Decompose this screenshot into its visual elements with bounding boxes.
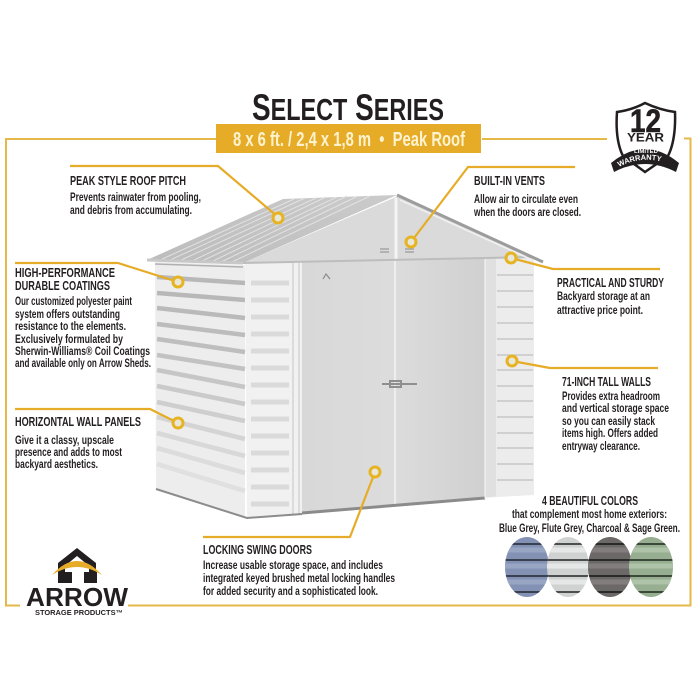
callout: 71-inch tall walls: 71-INCH TALL WALLS <box>562 375 651 389</box>
swatch: charcoal <box>588 537 630 597</box>
callout: built-in vents <box>406 167 581 247</box>
callout: built-in vents: when the doors are closed. <box>473 207 581 219</box>
callout: horizontal wall panels <box>15 409 183 471</box>
callout: 71-inch tall walls: Provides extra headroom <box>562 391 660 403</box>
warranty badge: WARRANTY <box>616 154 662 166</box>
warranty badge: YEAR <box>627 130 664 144</box>
warranty badge: LIMITED <box>634 149 658 155</box>
swatch: blue grey <box>504 536 550 598</box>
callout: horizontal wall panels: HORIZONTAL WALL PANELS <box>15 415 141 429</box>
door frame right <box>485 258 497 498</box>
callout: horizontal wall panels: backyard aesthetics. <box>15 459 98 471</box>
callout: built-in vents: BUILT-IN VENTS <box>474 174 545 188</box>
Arrow Storage Products logo: STORAGE PRODUCTS™ <box>35 610 123 617</box>
callout: horizontal wall panels: presence and adds to most <box>15 447 122 459</box>
Arrow Storage Products logo <box>26 548 128 617</box>
callout: horizontal wall panels: Give it a classy, upscale <box>15 435 114 447</box>
callout: durable coatings: Sherwin-Williams® Coil Coatings <box>15 346 150 358</box>
colour swatches <box>504 536 674 598</box>
swatch: flute grey <box>546 536 590 598</box>
door logo <box>323 274 330 279</box>
warranty badge: 12 <box>630 103 661 139</box>
callout: durable coatings: Exclusively formulated by <box>15 334 123 346</box>
callout: practical and sturdy: attractive price point. <box>557 305 643 317</box>
callout: practical and sturdy: Backyard storage at an <box>557 291 650 303</box>
warranty badge <box>611 102 679 174</box>
Arrow Storage Products logo: ARROW <box>26 582 128 612</box>
callout: durable coatings: system offers outstanding <box>15 309 120 321</box>
subtitle banner: 8 x 6 ft. / 2,4 x 1,8 m • Peak Roof <box>233 129 465 151</box>
callout: locking swing doors: for added security and a sophisticated look. <box>203 586 378 598</box>
roof <box>147 195 543 267</box>
front left panel <box>245 263 302 518</box>
shed base shadow <box>156 489 302 518</box>
callout: locking swing doors: Increase usable storage space, and includes <box>203 560 383 572</box>
shed illustration <box>147 195 543 518</box>
subtitle banner <box>216 124 481 153</box>
callout: 71-inch tall walls: items high. Offers added <box>562 428 658 440</box>
callout: 71-inch tall walls <box>507 356 669 453</box>
swatch: sage green <box>628 536 674 598</box>
colors heading text: 4 BEAUTIFUL COLORS <box>542 494 638 508</box>
left side wall <box>155 262 245 518</box>
callout: durable coatings: HIGH-PERFORMANCE <box>15 266 115 280</box>
callout: built-in vents: Allow air to circulate even <box>474 194 578 206</box>
callout: 71-inch tall walls: so you can easily stack <box>562 416 655 428</box>
callout: locking swing doors: LOCKING SWING DOORS <box>203 543 312 557</box>
title: SELECT SERIES <box>252 87 444 128</box>
callout: practical and sturdy <box>506 253 664 317</box>
callout: durable coatings: DURABLE COATINGS <box>15 279 110 293</box>
callout: 71-inch tall walls: entryway clearance. <box>562 441 640 453</box>
gold page frame <box>6 138 690 606</box>
front right panel <box>497 257 534 497</box>
door handle <box>382 381 417 387</box>
front gable <box>243 197 532 263</box>
front doors <box>302 258 485 513</box>
callout: durable coatings <box>15 263 183 370</box>
callout: peak style roof pitch: PEAK STYLE ROOF PITCH <box>70 174 186 188</box>
callout: durable coatings: and available only on Arrow Sheds. <box>15 358 151 370</box>
callout: peak style roof pitch: Prevents rainwater from pooling, <box>70 192 201 204</box>
callout: peak style roof pitch: and debris from accumulating. <box>70 205 192 217</box>
callout: durable coatings: Our customized polyester paint <box>15 296 132 308</box>
callout: locking swing doors <box>203 467 395 598</box>
callout: locking swing doors: integrated keyed brushed metal locking handles <box>203 573 395 585</box>
vents <box>380 249 414 252</box>
colors heading text <box>499 494 680 535</box>
callout: peak style roof pitch <box>70 166 283 223</box>
callout: durable coatings: resistance to the elements. <box>15 321 126 333</box>
